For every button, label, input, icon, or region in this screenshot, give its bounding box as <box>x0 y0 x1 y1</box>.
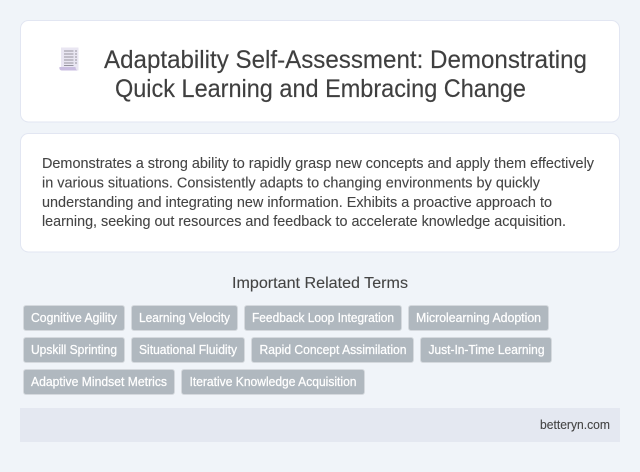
tag: Feedback Loop Integration: Feedback Loop Integration <box>252 311 394 325</box>
footer bar <box>20 408 620 442</box>
tag: Upskill Sprinting: Upskill Sprinting <box>31 343 117 357</box>
description text: learning, seeking out resources and feedback to accelerate knowledge acquisition. <box>42 214 566 230</box>
tag: Iterative Knowledge Acquisition <box>182 370 364 394</box>
tag: Iterative Knowledge Acquisition: Iterative Knowledge Acquisition <box>190 375 357 389</box>
tag: Learning Velocity <box>132 306 238 330</box>
tag list <box>24 306 552 394</box>
icon: document scroll <box>59 48 78 70</box>
description text: understanding and integrating new information. Exhibits a proactive approach to <box>42 195 552 211</box>
tag: Situational Fluidity: Situational Fluidity <box>139 343 238 357</box>
tag: Situational Fluidity <box>132 338 244 362</box>
tag: Just-In-Time Learning <box>420 338 552 362</box>
panel: description <box>20 134 620 252</box>
tag: Learning Velocity: Learning Velocity <box>139 311 231 325</box>
heading: related terms: Important Related Terms <box>232 275 408 292</box>
tag: Rapid Concept Assimilation <box>252 338 414 362</box>
panel: header card <box>20 20 620 122</box>
tag: Cognitive Agility: Cognitive Agility <box>31 311 118 325</box>
tag: Feedback Loop Integration <box>244 306 402 330</box>
title: Quick Learning and Embracing Change <box>115 75 526 103</box>
tag: Adaptive Mindset Metrics <box>24 370 174 394</box>
tag: Microlearning Adoption <box>408 306 548 330</box>
description text: in various situations. Consistently adapts to changing environments by quickly <box>42 176 541 192</box>
tag: Rapid Concept Assimilation: Rapid Concept Assimilation <box>260 343 407 357</box>
tag: Upskill Sprinting <box>24 338 124 362</box>
description text: Demonstrates a strong ability to rapidly grasp new concepts and apply them effectively <box>42 156 595 172</box>
title <box>104 46 587 103</box>
tag: Adaptive Mindset Metrics: Adaptive Mindset Metrics <box>31 375 167 389</box>
tag: Cognitive Agility <box>24 306 124 330</box>
title: Adaptability Self-Assessment: Demonstrating <box>104 46 587 74</box>
tag: Just-In-Time Learning: Just-In-Time Learning <box>428 343 545 357</box>
footer source text: betteryn.com <box>540 418 610 432</box>
tag: Microlearning Adoption: Microlearning Adoption <box>416 311 541 325</box>
description text <box>42 156 595 230</box>
